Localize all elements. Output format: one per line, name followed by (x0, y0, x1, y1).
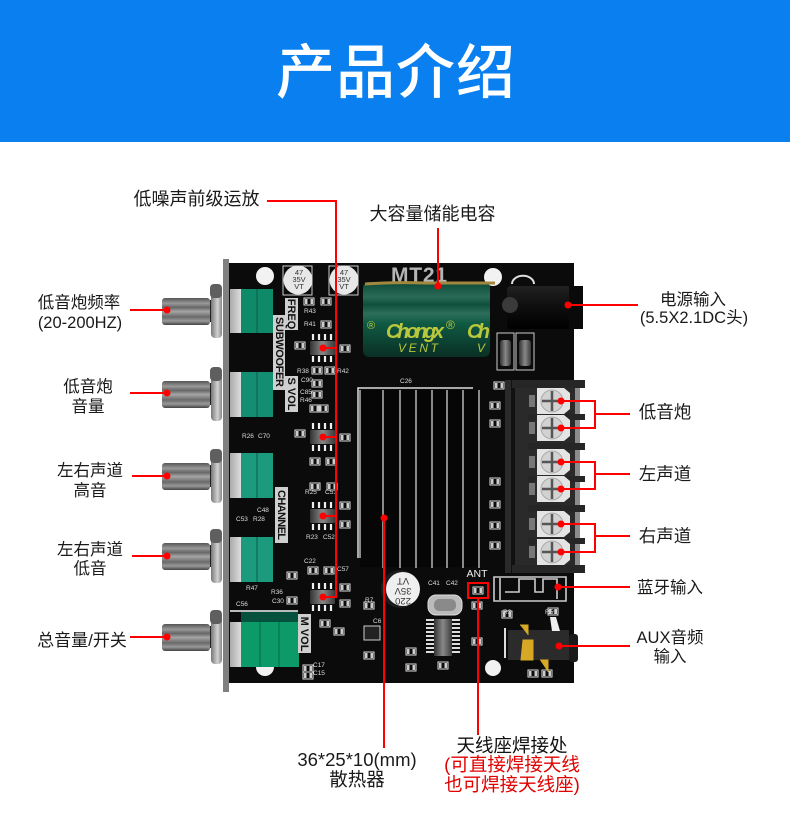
small smd components: C6 (373, 618, 382, 625)
silkscreen labels (273, 264, 488, 653)
icon: 220uF capacitor: 35V (394, 585, 411, 596)
arrow: capacitor leader (437, 228, 439, 286)
small smd components: R46 (300, 397, 312, 404)
small smd components: C57 (337, 566, 349, 573)
small smd components: C90 (301, 377, 313, 384)
small smd components: R26 (242, 433, 254, 440)
label: right channel: 右声道 (639, 526, 691, 546)
icon: small capacitors: 47 (295, 268, 303, 277)
small smd components: C56 (236, 601, 248, 608)
icon: small capacitors: VT (294, 282, 304, 291)
silkscreen labels: MT21 (391, 264, 447, 287)
icon: op amp chips (310, 334, 335, 611)
silkscreen labels: FREQ (285, 299, 297, 330)
icon: small capacitors: 35V (337, 275, 351, 284)
arrow: op amp leader (267, 201, 336, 597)
arrow: power leader (568, 304, 638, 306)
icon: potentiometers (230, 289, 299, 667)
label: subwoofer: 低音炮 (639, 402, 691, 422)
icon: crystal oscillator (428, 595, 462, 615)
icon: aux jack (504, 617, 578, 672)
label: antenna (444, 735, 580, 795)
silkscreen labels: M VOL (298, 617, 310, 652)
label: bass volume: 音量 (72, 397, 104, 416)
small smd components: R42 (337, 368, 349, 375)
small smd components: C52 (323, 534, 335, 541)
small smd components: R36 (271, 589, 283, 596)
label: aux input: 输入 (654, 647, 686, 666)
icon: large storage capacitor: Ch (467, 321, 490, 343)
icon: large storage capacitor: ® (446, 318, 455, 332)
arrow: knob leaders (130, 310, 167, 637)
label: capacitor: 大容量储能电容 (370, 204, 496, 224)
small smd components: R25 (305, 489, 317, 496)
small smd components: R7 (365, 597, 374, 604)
small smd components: R47 (246, 585, 258, 592)
label: mid bass: 左右声道 (57, 540, 123, 559)
silkscreen labels: CHANNEL (275, 490, 287, 540)
small smd components: C48 (257, 507, 269, 514)
panel: front metal plate (223, 259, 229, 692)
label: power input: 电源输入 (660, 290, 726, 309)
icon: large storage capacitor (363, 282, 495, 357)
icon: bluetooth chip (426, 619, 460, 656)
small smd components: C42 (446, 580, 458, 587)
icon: terminal block (505, 380, 585, 573)
icon: heat sink (358, 378, 480, 568)
small smd components: C53 (236, 516, 248, 523)
label: heat sink: 36*25*10(mm) (297, 749, 417, 770)
icon: 220uF capacitor: 220 (395, 595, 411, 606)
arrow: leader dots (164, 282, 572, 650)
arrow: bluetooth and aux leaders (558, 587, 630, 646)
small smd components: R3 (503, 609, 512, 616)
arrow: antenna leader (468, 583, 488, 735)
label: treble: 高音 (74, 481, 106, 500)
label: heat sink: 散热器 (329, 769, 385, 790)
small smd components: C70 (258, 433, 270, 440)
small smd components (236, 298, 558, 679)
icon: small capacitors: 47 (340, 268, 348, 277)
small smd components: C22 (304, 558, 316, 565)
small smd components: R23 (306, 534, 318, 541)
small smd components: R59 (545, 609, 557, 616)
label: bass frequency: 低音炮频率 (38, 293, 120, 312)
icon: large storage capacitor: V (477, 341, 486, 355)
label: mid bass: 低音 (74, 559, 106, 578)
label: antenna: 天线座焊接处 (456, 735, 568, 756)
icon: power jack (502, 276, 583, 329)
small smd components: C30 (272, 598, 284, 605)
header banner (0, 0, 790, 142)
label: antenna: (可直接焊接天线 (444, 754, 580, 775)
icon: large storage capacitor: ® (367, 320, 375, 332)
icon: pcb antenna (494, 577, 566, 601)
icon: small capacitors: 35V (292, 275, 306, 284)
silkscreen labels: S VOL (285, 377, 297, 411)
icon: knobs (162, 284, 222, 664)
arrow: heat sink leader (383, 518, 385, 748)
icon: large storage capacitor: VENT (398, 341, 440, 355)
label: left channel: 左声道 (639, 464, 691, 484)
icon: small capacitors (283, 266, 358, 295)
panel: pcb (229, 263, 574, 683)
small smd components: C41 (428, 580, 440, 587)
callout lines (130, 201, 638, 748)
small smd components: C51 (325, 489, 337, 496)
title: 产品介绍 (276, 40, 516, 106)
small smd components: C15 (313, 670, 325, 677)
label: bass frequency: (20-200HZ) (38, 314, 122, 332)
label: op amp: 低噪声前级运放 (134, 189, 260, 209)
label: antenna: 也可焊接天线座) (444, 774, 580, 795)
icon: 220uF capacitor: VT (397, 575, 409, 586)
icon: diodes (497, 333, 534, 370)
small smd components: R41 (304, 321, 316, 328)
arrow: terminal brackets (561, 401, 630, 552)
small smd components: R43 (304, 308, 316, 315)
icon: large storage capacitor: Chongx (386, 321, 445, 343)
icon: 220uF capacitor (381, 570, 420, 608)
label: treble: 左右声道 (57, 461, 123, 480)
small smd components: C85 (300, 389, 312, 396)
icon: heat sink: C26 (400, 378, 412, 385)
label: master volume: 总音量/开关 (37, 631, 127, 650)
amplifier board photo (162, 259, 585, 692)
label: bass volume: 低音炮 (63, 377, 113, 396)
icon: mounting holes (256, 267, 502, 676)
icon: small capacitors: VT (339, 282, 349, 291)
small smd components: R28 (253, 516, 265, 523)
label: bluetooth input: 蓝牙输入 (637, 578, 703, 597)
small smd components: R38 (297, 368, 309, 375)
small smd components: C17 (313, 662, 325, 669)
silkscreen labels: SUBWOOFER (273, 317, 285, 387)
silkscreen labels: ANT (466, 568, 488, 580)
label: aux input: AUX音频 (637, 628, 703, 647)
label: power input: (5.5X2.1DC头) (640, 308, 748, 327)
